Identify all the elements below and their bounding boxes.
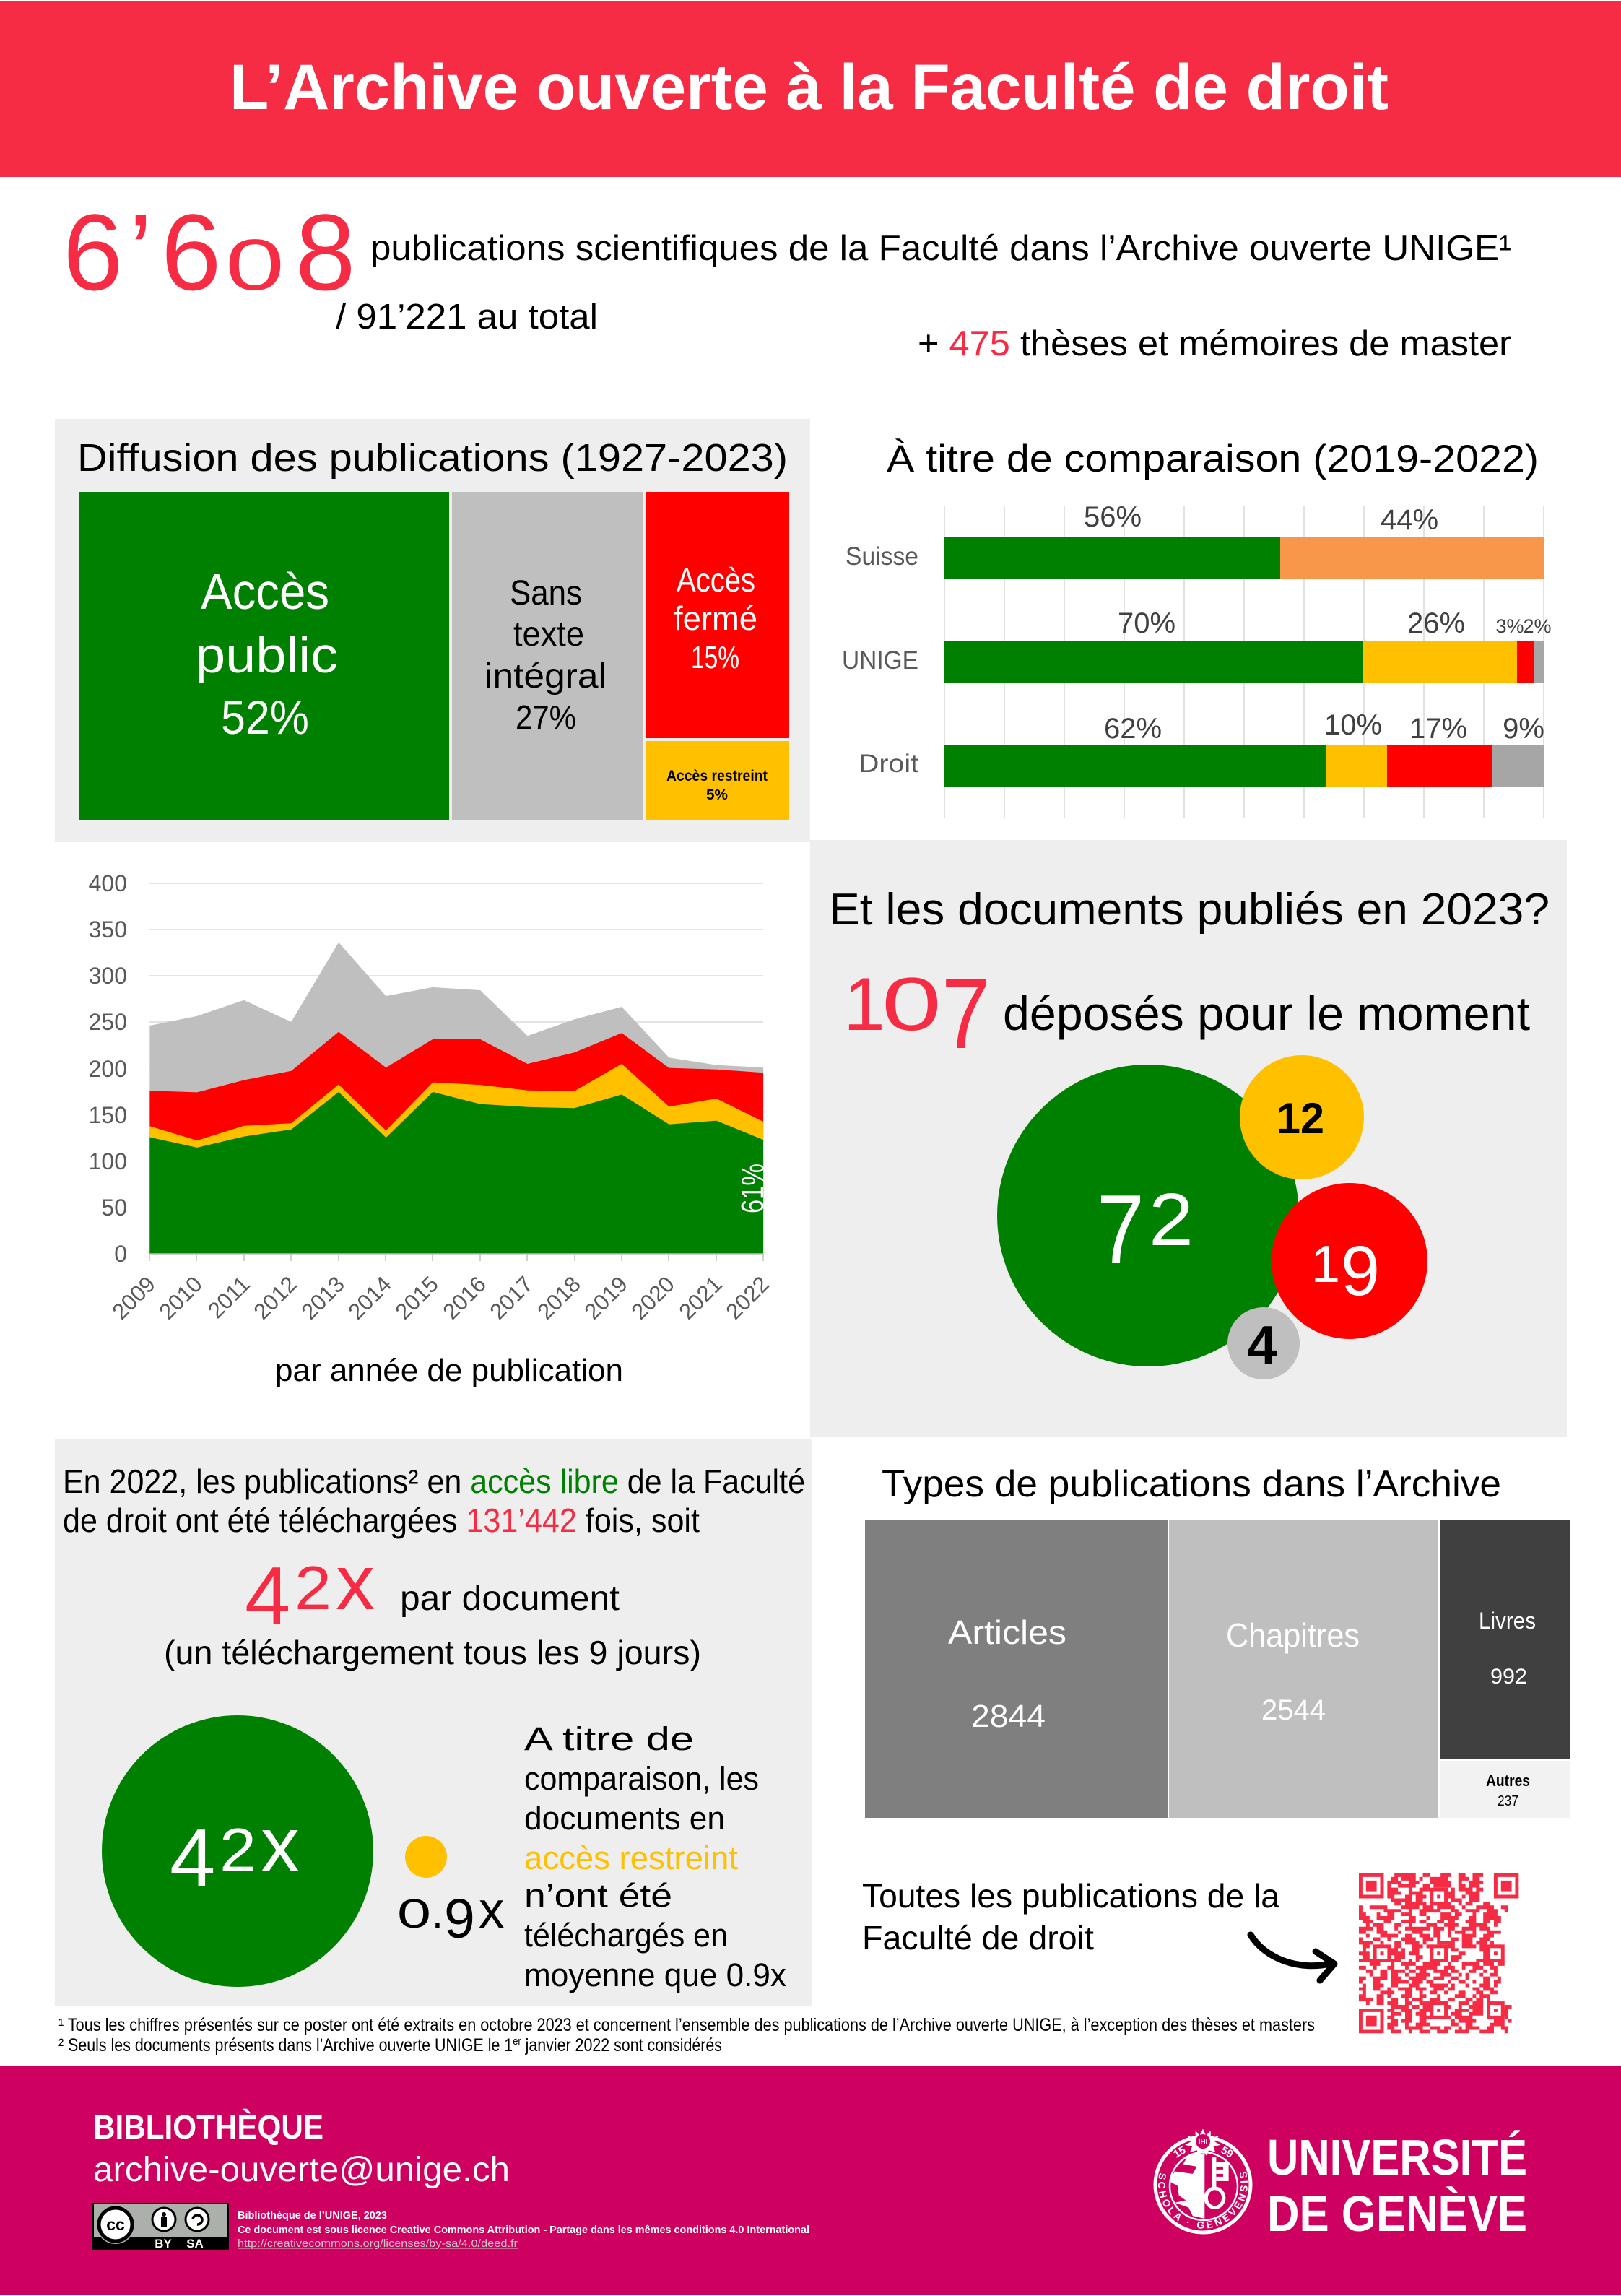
comparison paragraph: téléchargés en [524, 1917, 728, 1954]
big number 6'608: 6 [161, 191, 221, 313]
y axis labels: 350 [89, 917, 127, 943]
treemap: open access public: Accès [201, 563, 329, 620]
treemap: restricted access: Accès restreint [666, 768, 768, 784]
big number 6'608: 0 [225, 225, 284, 306]
university name: UNIVERSITÉ [1267, 2129, 1527, 2185]
y axis labels [89, 870, 127, 1267]
x axis labels: 2012 [248, 1271, 302, 1325]
big number 6'608: 8 [295, 191, 355, 313]
treemap: closed access: 15% [691, 640, 739, 675]
bubble: closed [1272, 1183, 1427, 1339]
link text to all publications [862, 1877, 1279, 1957]
bubble: closed: 1 [1311, 1236, 1340, 1294]
treemap: no full text: intégral [484, 657, 607, 696]
arrow to QR code [1251, 1935, 1334, 1980]
bubble: public: 2 [1149, 1178, 1194, 1261]
bar: Droit [859, 709, 1544, 787]
treemap: livres: 992 [1490, 1665, 1527, 1689]
footnotes: janvier 2022 sont considérés [521, 2035, 722, 2055]
bar: UNIGE: UNIGE [842, 646, 918, 675]
x axis labels: 2020 [626, 1271, 679, 1325]
icon: creative commons badge: cc [106, 2215, 125, 2234]
comparison paragraph: moyenne que 0.9x [524, 1957, 786, 1993]
treemap: open access public [79, 492, 449, 820]
x axis labels: 2010 [154, 1271, 207, 1325]
header banner [0, 1, 1621, 177]
y axis labels: 100 [89, 1148, 127, 1174]
comparison paragraph: comparaison, les [524, 1760, 759, 1797]
circle: restricted 0.9x [397, 1836, 504, 1950]
bar: UNIGE: 3% [1495, 615, 1524, 637]
x axis labels: 2021 [674, 1271, 727, 1325]
heading: documents 2023: Et les documents publiés en 2023? [829, 885, 1550, 935]
footer band [0, 2066, 1621, 2295]
panel: comparison stacked bars [842, 438, 1552, 818]
footnotes: ¹ Tous les chiffres présentés sur ce poster ont été extraits en octobre 2023 et concernent l’ensemble des publications de l’Archive ouverte UNIGE, à l’exception des thèses et masters [58, 2015, 1315, 2035]
treemap: open access public: public [195, 627, 338, 683]
circle: restricted 0.9x: 9 [444, 1888, 475, 1950]
y axis labels: 300 [89, 963, 127, 989]
treemap: livres: Livres [1479, 1608, 1536, 1634]
publications sentence: publications scientifiques de la Faculté dans l’Archive ouverte UNIGE¹ [370, 229, 1511, 268]
circle: restricted 0.9x: . [432, 1891, 443, 1937]
licence text [238, 2209, 809, 2250]
footnotes [58, 2015, 1315, 2055]
big number 107: 1 [843, 963, 885, 1047]
treemap: no full text: 27% [516, 698, 576, 736]
panel: downloads [55, 1439, 812, 2006]
bubble: restricted [1240, 1055, 1364, 1179]
bar: Droit: 17% [1409, 713, 1467, 745]
icon: university seal: IHI [1199, 2139, 1208, 2146]
treemap: restricted access: 5% [706, 787, 728, 803]
big number 107: 0 [882, 963, 942, 1047]
big number 6'608: ’ [129, 191, 152, 313]
circle: open access 42x [102, 1715, 373, 1987]
heading: diffusion: Diffusion des publications (1927-2023) [77, 436, 788, 480]
icon: creative commons badge: BY [155, 2237, 172, 2250]
bar: UNIGE: 2% [1523, 615, 1552, 637]
theses count: + 475 thèses et mémoires de master [918, 324, 1511, 363]
comparison paragraph [524, 1720, 786, 1993]
big number 6'608: 6 [63, 191, 123, 313]
licence text: Ce document est sous licence Creative Commons Attribution - Partage dans les mêmes conditions 4.0 International [238, 2224, 809, 2236]
bar: Suisse [846, 501, 1544, 579]
download sentence: En 2022, les publications² en accès libre de la Faculté [63, 1463, 805, 1500]
panel: downloads: de droit ont été téléchargées 131’442 fois, soit [63, 1502, 700, 1539]
bar: UNIGE: 26% [1407, 607, 1465, 639]
comparison paragraph: accès restreint [524, 1840, 738, 1876]
y axis labels: 200 [89, 1056, 127, 1082]
circle: restricted 0.9x: x [479, 1882, 504, 1939]
x axis labels: 2013 [296, 1271, 349, 1325]
treemap: autres [1440, 1761, 1570, 1818]
stacked areas [149, 943, 763, 1254]
circle: restricted 0.9x: 0 [397, 1891, 431, 1937]
treemap: restricted access [646, 741, 789, 820]
treemap: articles: 2844 [971, 1699, 1046, 1734]
treemap: chapitres: Chapitres [1226, 1616, 1360, 1654]
big number 42x: 2 [295, 1554, 331, 1623]
bar: Droit: 10% [1324, 709, 1382, 741]
treemap: chapitres [1169, 1520, 1438, 1818]
rotated 61% label: 61% [735, 1164, 770, 1213]
big number 42x: x [336, 1538, 375, 1626]
panel: publication types [865, 1463, 1570, 1818]
x axis labels: 2022 [721, 1271, 774, 1325]
bubble: other: 4 [1247, 1314, 1277, 1375]
bar: UNIGE: 70% [1118, 607, 1175, 639]
bubble: closed: 9 [1341, 1231, 1380, 1310]
bar: Droit: 62% [1104, 713, 1162, 745]
x axis caption: par année de publication [275, 1353, 623, 1388]
y axis labels: 400 [89, 870, 127, 896]
x axis labels: 2018 [532, 1271, 586, 1325]
treemap: articles: Articles [948, 1613, 1066, 1651]
circle: open access 42x: 4 [170, 1813, 215, 1905]
frequency caption: (un téléchargement tous les 9 jours) [164, 1634, 701, 1671]
treemap: autres: 237 [1498, 1793, 1518, 1809]
bubble: restricted: 12 [1277, 1094, 1324, 1143]
link text to all publications: Toutes les publications de la [862, 1877, 1279, 1915]
link text to all publications: Faculté de droit [862, 1919, 1094, 1957]
circle: open access 42x: 2 [220, 1816, 256, 1885]
bar: UNIGE [842, 607, 1552, 683]
big number 42x: 4 [245, 1551, 290, 1642]
licence text: Bibliothèque de l’UNIGE, 2023 [238, 2209, 387, 2222]
heading: types: Types de publications dans l’Archive [882, 1463, 1501, 1505]
bubble: public: 7 [1097, 1174, 1144, 1284]
comparison paragraph: n’ont été [524, 1877, 672, 1914]
icon: university seal: 15 [1171, 2144, 1188, 2161]
treemap: open access public: 52% [221, 690, 309, 744]
treemap: autres: Autres [1486, 1772, 1530, 1790]
icon: university seal [1154, 2129, 1252, 2235]
bar: Suisse: 56% [1084, 501, 1142, 533]
treemap: chapitres: 2544 [1261, 1694, 1326, 1726]
treemap: no full text [452, 492, 643, 820]
x axis labels: 2011 [203, 1271, 255, 1323]
x axis labels [107, 1271, 774, 1325]
bubble: public [997, 1065, 1299, 1366]
panel: documents 2023 [810, 840, 1567, 1437]
footnotes: ² Seuls les documents présents dans l’Archive ouverte UNIGE le 1 [58, 2035, 589, 2055]
area chart by publication year [89, 870, 774, 1388]
comparison paragraph: A titre de [524, 1720, 694, 1757]
icon: university seal: SCHOLA · GENEVENSIS [1158, 2171, 1248, 2229]
library name: BIBLIOTHÈQUE [93, 2108, 323, 2146]
y axis labels: 250 [89, 1009, 127, 1035]
x axis labels: 2015 [390, 1271, 443, 1325]
icon: university seal: 59 [1219, 2144, 1235, 2161]
licence text: http://creativecommons.org/licenses/by-sa/4.0/deed.fr [238, 2237, 518, 2250]
treemap: closed access: fermé [674, 599, 757, 637]
x axis labels: 2017 [484, 1271, 538, 1325]
treemap: closed access: Accès [677, 561, 755, 599]
bar: Droit: 9% [1503, 713, 1544, 745]
panel: diffusion des publications [55, 419, 810, 842]
per document caption: par document [400, 1580, 620, 1618]
x axis labels: 2016 [438, 1271, 491, 1325]
y axis labels: 0 [114, 1241, 127, 1267]
treemap: closed access [646, 492, 789, 738]
treemap: no full text: Sans [510, 574, 582, 612]
x axis labels: 2014 [343, 1271, 396, 1325]
x axis labels: 2009 [107, 1271, 160, 1325]
headline statistics [63, 191, 1511, 363]
deposited caption: déposés pour le moment [1003, 987, 1530, 1040]
bar: Droit: Droit [859, 750, 918, 778]
university name: DE GENÈVE [1267, 2185, 1527, 2242]
treemap: articles [865, 1520, 1168, 1818]
circle: open access 42x: x [261, 1801, 300, 1888]
title: L’Archive ouverte à la Faculté de droit [230, 51, 1389, 123]
big number 107: 7 [942, 958, 990, 1070]
y axis labels: 50 [101, 1195, 127, 1221]
icon: creative commons badge: SA [186, 2237, 204, 2250]
contact email: archive-ouverte@unige.ch [93, 2151, 510, 2189]
heading: comparaison: À titre de comparaison (2019-2022) [887, 438, 1539, 480]
x axis labels: 2019 [579, 1271, 633, 1325]
bar: Suisse: 44% [1381, 504, 1438, 536]
total count: / 91’221 au total [336, 298, 598, 337]
treemap: livres [1440, 1520, 1570, 1759]
treemap: no full text: texte [513, 615, 584, 654]
QR code [1359, 1873, 1518, 2033]
y axis labels: 150 [89, 1102, 127, 1128]
comparison paragraph: documents en [524, 1800, 725, 1837]
university name [1267, 2129, 1527, 2242]
icon: creative commons badge [92, 2203, 229, 2250]
bar: Suisse: Suisse [846, 542, 918, 571]
footnotes: er [513, 2035, 521, 2048]
bubble: other [1227, 1307, 1300, 1379]
